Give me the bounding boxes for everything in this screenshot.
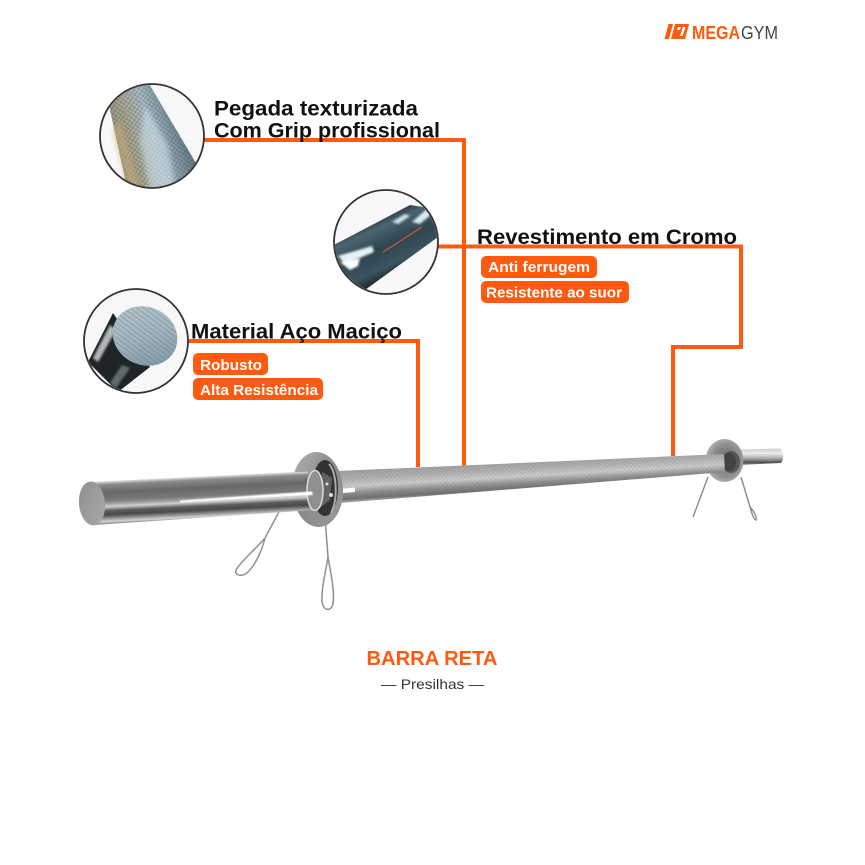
spring clips: left collar: [236, 510, 333, 609]
heading: chrome: Revestimento em Cromo: [477, 226, 737, 249]
tag: Alta Resistência: Alta Resistência: [200, 383, 319, 399]
tag: Anti ferrugem: Anti ferrugem: [488, 260, 590, 276]
tag: Robusto: Robusto: [200, 358, 262, 374]
title: BARRA RETA: [366, 648, 498, 670]
detail circle: chrome coating: [330, 190, 445, 294]
tag: Resistente ao suor: Resistente ao suor: [486, 286, 622, 302]
tag: Resistente ao suor: [481, 281, 629, 303]
tag: Robusto: [193, 353, 268, 375]
wordmark: GYM: GYM: [741, 23, 778, 43]
logo: MegaGym: [664, 23, 778, 43]
connector: grip line: [204, 140, 464, 466]
heading: grip: Com Grip profissional: [214, 120, 440, 142]
product: barbell: [77, 439, 783, 609]
connector: material line: [188, 341, 418, 467]
detail circle: knurled grip: [99, 83, 205, 189]
connector: chrome line: [438, 246, 741, 456]
knurled shaft: [338, 454, 725, 503]
heading: grip: [214, 98, 440, 142]
icon: logo mark: [664, 24, 689, 39]
end section of bar: [92, 472, 314, 525]
subtitle: — Presilhas —: [381, 676, 484, 692]
detail circle: solid steel section: [84, 289, 188, 393]
tag: Alta Resistência: [193, 378, 323, 400]
left collar: [290, 451, 345, 528]
heading: grip: Pegada texturizada: [214, 98, 418, 120]
collar ring: [307, 470, 323, 510]
end cap: [77, 480, 107, 527]
highlight: [180, 492, 313, 502]
spring clips: right collar: [693, 477, 756, 520]
wordmark: MEGA: MEGA: [692, 23, 740, 43]
stub end: [738, 448, 783, 465]
tag: Anti ferrugem: [481, 256, 597, 278]
heading: material: Material Aço Maciço: [191, 320, 402, 344]
right collar: [706, 439, 744, 482]
